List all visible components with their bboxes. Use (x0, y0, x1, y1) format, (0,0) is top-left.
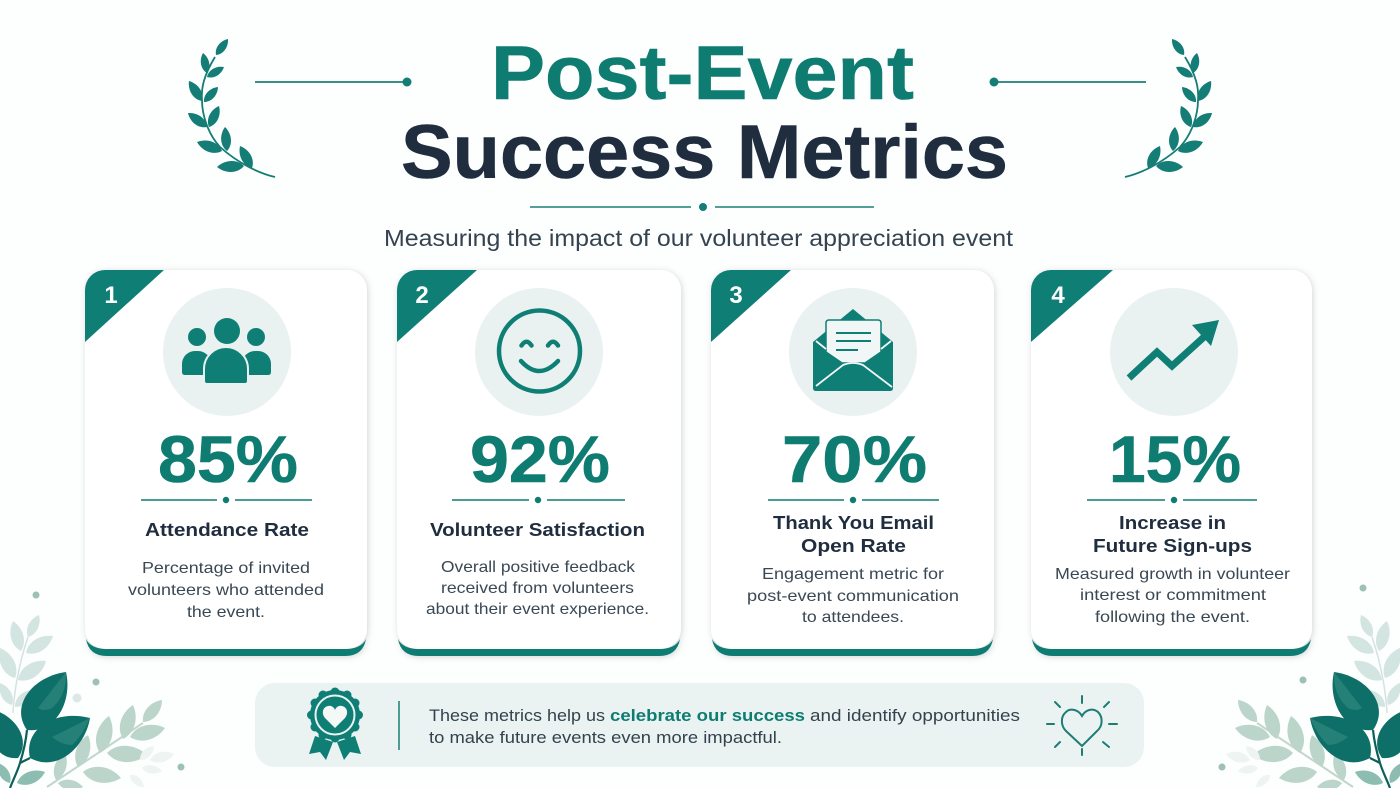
foliage: bottom left (0, 613, 175, 788)
badge 4: 4 (1051, 282, 1065, 309)
icon: smiley (475, 288, 603, 416)
description: Engagement metric for (762, 566, 945, 583)
title divider (530, 203, 874, 211)
metric 85%: 85% (158, 422, 298, 496)
icon: trend arrow (1110, 288, 1238, 416)
panel: card 2 volunteer satisfaction (397, 270, 681, 656)
callout text: celebrate our success (610, 706, 805, 725)
description: Measured growth in volunteer (1055, 566, 1291, 583)
callout text: to make future events even more impactful. (429, 728, 782, 747)
label: thank you email open rate (773, 512, 934, 556)
description (1055, 566, 1291, 626)
panel: card 3 thank you email open rate (711, 270, 994, 656)
description: post-event communication (747, 588, 959, 605)
description: Percentage of invited (142, 560, 310, 577)
description: about their event experience. (426, 601, 649, 618)
foliage: bottom right (1225, 613, 1400, 788)
badge 1: 1 (104, 282, 118, 309)
icon: award ribbon with heart (307, 688, 363, 760)
description: received from volunteers (441, 580, 634, 597)
metric 15%: 15% (1109, 422, 1241, 496)
metric 70%: 70% (782, 422, 927, 496)
panel: bottom callout (255, 683, 1144, 767)
label: thank you email open rate: Thank You Email (773, 512, 934, 533)
description (747, 566, 959, 626)
icon: people (163, 288, 291, 416)
decorative line: top left (255, 78, 412, 86)
description: Overall positive feedback (441, 559, 636, 576)
description: following the event. (1095, 609, 1250, 626)
icon: open envelope (789, 288, 917, 416)
label: increase in future sign-ups: Increase in (1119, 512, 1226, 533)
description: the event. (187, 604, 265, 621)
callout text (429, 706, 1020, 747)
badge 2: 2 (415, 282, 429, 309)
icon: shining heart (1047, 696, 1117, 755)
callout text: These metrics help us (429, 706, 605, 725)
label: thank you email open rate: Open Rate (801, 535, 906, 556)
title: Success Metrics (401, 110, 1008, 195)
description (426, 559, 649, 618)
title (401, 31, 1008, 195)
panel: card 4 increase in future sign-ups (1031, 270, 1312, 656)
callout text: and identify opportunities (810, 706, 1020, 725)
label: volunteer satisfaction: Volunteer Satisfaction (430, 519, 645, 540)
subtitle: Measuring the impact of our volunteer appreciation event (384, 225, 1014, 251)
laurel: top left (185, 37, 275, 177)
metric 92%: 92% (470, 422, 610, 496)
laurel: top right (1125, 37, 1215, 177)
label: increase in future sign-ups (1093, 512, 1252, 556)
description: to attendees. (802, 609, 904, 626)
badge 1 (85, 270, 164, 342)
badge 2 (397, 270, 477, 342)
decorative dots (32, 584, 1366, 770)
decorative line: top right (990, 78, 1146, 86)
label: attendance rate: Attendance Rate (145, 519, 309, 540)
badge 3: 3 (729, 282, 743, 309)
description: volunteers who attended (128, 582, 324, 599)
description (128, 560, 324, 621)
title: Post-Event (491, 31, 914, 116)
vertical divider (398, 701, 400, 750)
label: increase in future sign-ups: Future Sign-ups (1093, 535, 1252, 556)
badge 3 (711, 270, 791, 342)
badge 4 (1031, 270, 1113, 342)
description: interest or commitment (1080, 587, 1267, 604)
panel: card 1 attendance rate (85, 270, 367, 656)
